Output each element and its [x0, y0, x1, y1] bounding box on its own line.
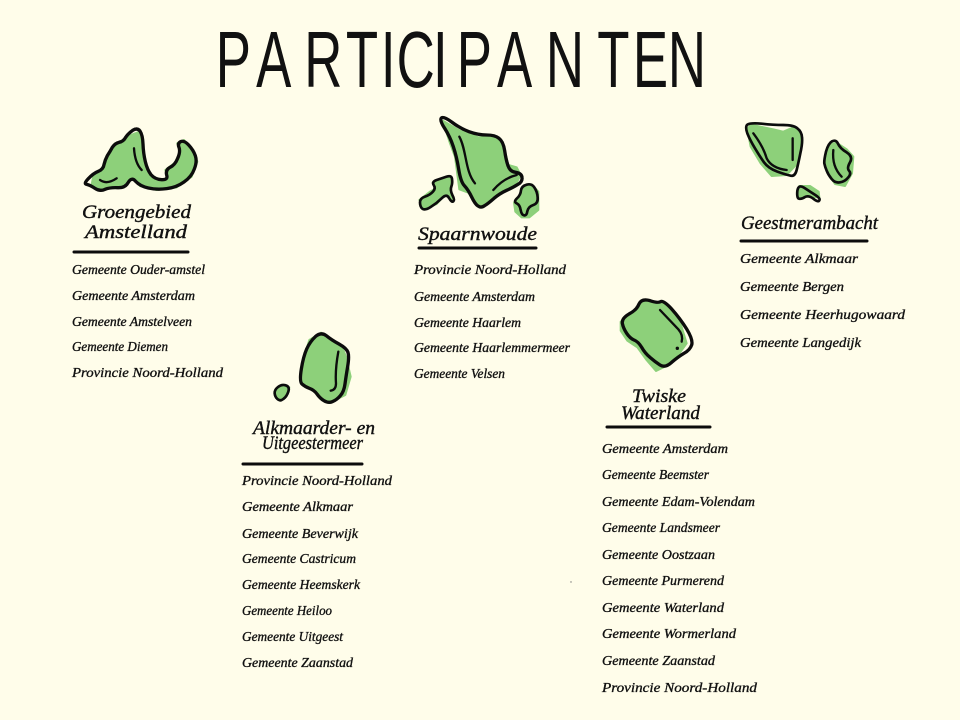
participant list: Gemeente Edam-Volendam [602, 495, 755, 510]
participant list: Provincie Noord-Holland [601, 681, 758, 696]
icon: map Twiske Waterland [621, 300, 692, 371]
participant list: Gemeente Beemster [602, 468, 710, 483]
participant list: Provincie Noord-Holland [71, 366, 224, 381]
heading: Groengebied [82, 202, 192, 223]
participant list: Gemeente Oostzaan [602, 548, 715, 563]
icon: map Groengebied Amstelland [85, 129, 197, 190]
panel: Spaarnwoude [413, 117, 571, 382]
participant list: Gemeente Beverwijk [242, 527, 359, 542]
participant list: Gemeente Bergen [740, 280, 844, 295]
participant list: Gemeente Amstelveen [72, 315, 192, 330]
participant list: Gemeente Diemen [72, 340, 168, 355]
participant list: Gemeente Heiloo [242, 604, 332, 619]
heading: Spaarnwoude [418, 224, 537, 245]
participant list: Gemeente Wormerland [602, 627, 737, 642]
participant list: Gemeente Alkmaar [242, 500, 354, 515]
heading [82, 202, 192, 243]
participant list: Gemeente Zaanstad [242, 656, 354, 671]
participant list: Gemeente Castricum [242, 552, 356, 567]
title: PARTICIPANTEN [216, 16, 706, 105]
heading [621, 386, 701, 424]
participant list: Gemeente Alkmaar [740, 252, 859, 267]
heading: Geestmerambacht [741, 213, 879, 234]
participant list: Gemeente Waterland [602, 601, 725, 616]
participant list [601, 442, 758, 696]
participant list [241, 474, 393, 671]
participant list: Gemeente Purmerend [602, 574, 725, 589]
participant list: Gemeente Uitgeest [242, 630, 344, 645]
panel: Geestmerambacht [740, 123, 906, 351]
participant list [740, 252, 906, 351]
participant list [413, 263, 571, 382]
participant list: Gemeente Langedijk [740, 336, 862, 351]
heading: Uitgeestermeer [262, 433, 364, 454]
heading [251, 418, 375, 454]
participant list: Gemeente Velsen [414, 367, 505, 382]
icon: map Alkmaarder- en Uitgeestermeer [275, 333, 351, 402]
participant list: Provincie Noord-Holland [413, 263, 567, 278]
heading: Amstelland [83, 222, 188, 243]
participant list: Gemeente Heerhugowaard [740, 308, 906, 323]
participant list: Gemeente Heemskerk [242, 578, 361, 593]
participant list: Gemeente Landsmeer [602, 521, 721, 536]
participant list: Gemeente Amsterdam [602, 442, 728, 457]
participant list: Gemeente Haarlemmermeer [414, 341, 571, 356]
participant list: Gemeente Haarlem [414, 316, 521, 331]
participant list [71, 263, 224, 381]
icon: map Spaarnwoude [419, 117, 538, 217]
icon: map Geestmerambacht [746, 123, 853, 201]
participant list: Gemeente Amsterdam [414, 290, 535, 305]
panel: Alkmaarder- en Uitgeestermeer [241, 333, 393, 671]
participant list: Gemeente Zaanstad [602, 654, 716, 669]
participant list: Provincie Noord-Holland [241, 474, 393, 489]
participant list: Gemeente Ouder-amstel [72, 263, 205, 278]
panel: Groengebied Amstelland [71, 129, 224, 381]
panel: Twiske Waterland [601, 300, 758, 696]
participant list: Gemeente Amsterdam [72, 289, 195, 304]
heading: Alkmaarder- en [251, 418, 375, 439]
heading: Twiske [632, 386, 686, 407]
heading: Waterland [621, 403, 701, 424]
